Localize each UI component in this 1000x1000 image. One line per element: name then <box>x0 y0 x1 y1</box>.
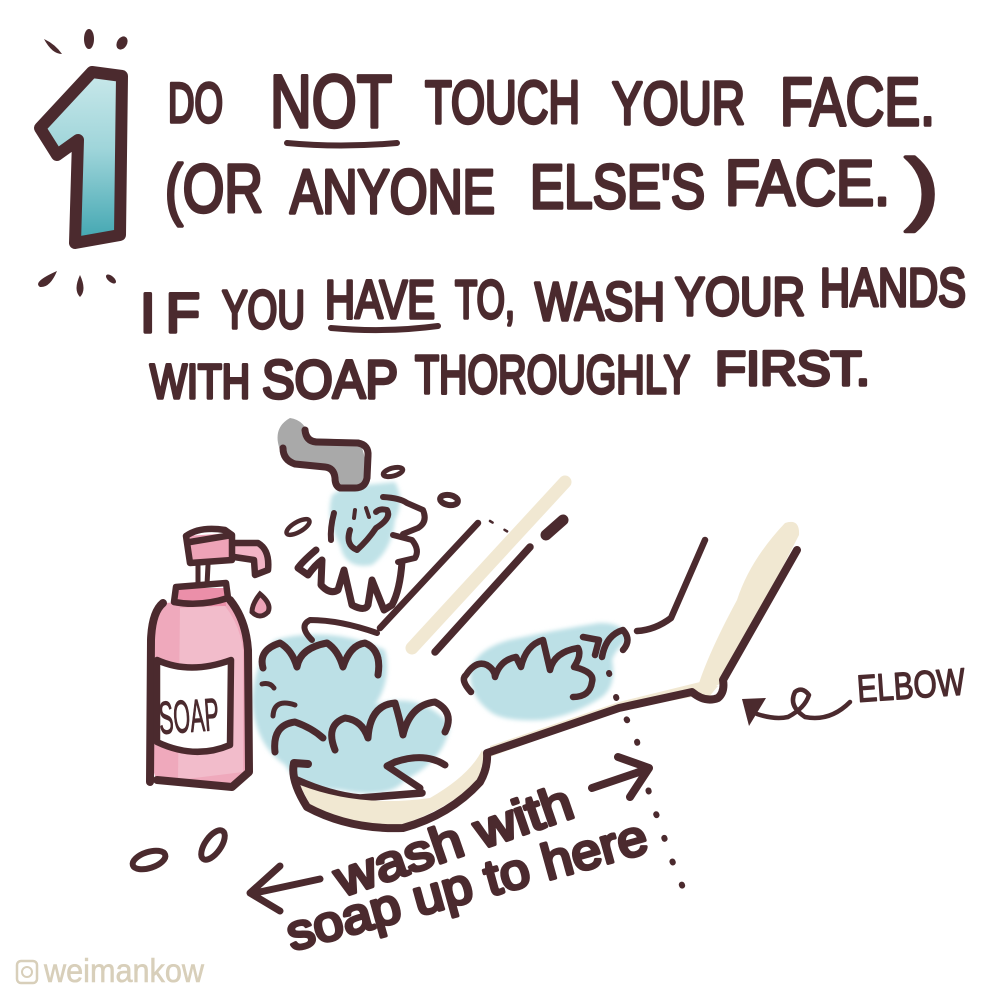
subheading line 1: YOU <box>222 280 305 340</box>
soap bottle: SOAP <box>157 688 221 744</box>
soap up to here label: soap up to here <box>280 808 653 962</box>
heading line 2: ELSE'S <box>530 153 705 222</box>
heading line 1: NOT <box>270 60 392 143</box>
dashed wash limit line <box>609 673 690 905</box>
soap drops bottom <box>130 826 229 873</box>
subheading line 1: YOUR <box>675 267 805 327</box>
subheading line 2: WITH <box>150 356 250 409</box>
heading line 1: FACE. <box>780 64 935 140</box>
elbow pointer <box>742 690 850 726</box>
subheading line 1: WASH <box>535 272 665 332</box>
arrow left <box>250 866 320 911</box>
wash with label: wash with <box>326 774 580 908</box>
big number 1 <box>40 72 122 243</box>
subheading line 2 <box>150 343 870 410</box>
subheading line 2: THOROUGHLY <box>415 345 690 405</box>
underline under HAVE <box>331 326 438 330</box>
sparks around number <box>38 29 130 297</box>
hand and forearm outline with cream shadow <box>293 522 799 828</box>
subheading line 2: FIRST. <box>715 343 870 396</box>
heading line 2: ) <box>905 143 939 232</box>
upper arm lines <box>380 482 565 652</box>
water drops and stream <box>284 466 459 610</box>
faucet <box>278 418 368 488</box>
subheading line 1 <box>140 258 966 344</box>
heading line 2: FACE. <box>725 147 890 219</box>
subheading line 1: IF <box>140 281 200 344</box>
hand in foam <box>262 620 448 798</box>
foam wash on forearm <box>470 623 628 720</box>
subheading line 1: HAVE <box>325 270 435 330</box>
subheading line 1: TO, <box>455 270 515 330</box>
water splash wash <box>330 482 400 566</box>
subheading line 2: SOAP <box>262 350 398 410</box>
heading line 1 <box>168 60 935 143</box>
heading line 2 <box>165 143 939 232</box>
heading line 2: ANYONE <box>290 158 495 227</box>
forearm foam bubbles <box>464 630 628 697</box>
heading line 1: YOUR <box>612 70 745 137</box>
underline under NOT <box>287 143 397 146</box>
foam wash on top arm <box>252 634 450 793</box>
credit: instagram handle: weimankow <box>43 952 204 989</box>
arrow right <box>592 757 649 797</box>
elbow label: ELBOW <box>856 662 966 711</box>
heading line 1: TOUCH <box>425 69 580 136</box>
heading line 1: DO <box>168 71 223 134</box>
soap bottle <box>150 529 269 787</box>
heading line 2: (OR <box>165 151 263 227</box>
